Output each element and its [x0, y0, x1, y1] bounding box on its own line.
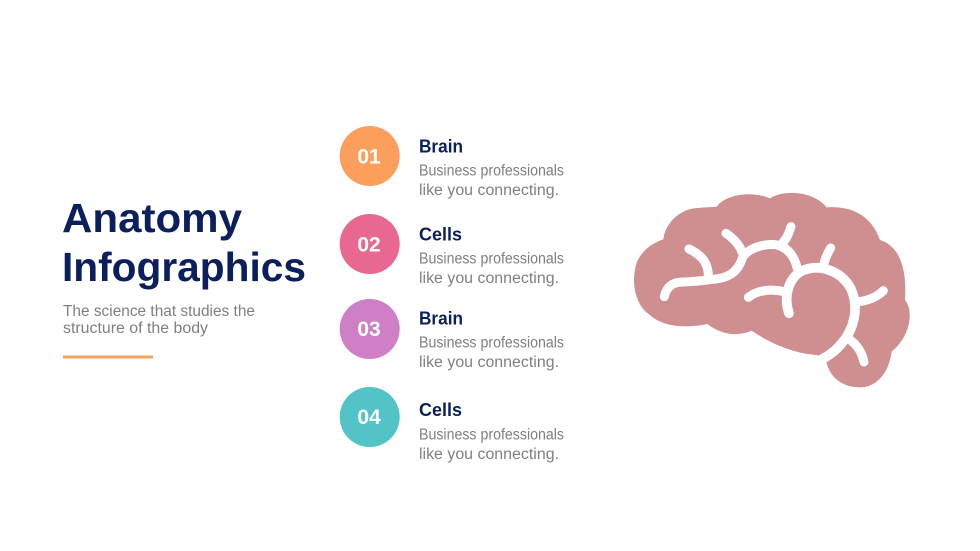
subtitle: structure of the body: [63, 320, 208, 337]
description: [419, 334, 564, 371]
heading: Brain: Brain: [419, 136, 463, 156]
description: Business professionals: [419, 162, 564, 180]
badge 01: 01: [357, 146, 381, 168]
description: Business professionals: [419, 250, 564, 268]
badge 02: 02: [357, 234, 381, 256]
badge 04: [340, 387, 400, 447]
description: like you connecting.: [419, 182, 559, 199]
description: [419, 162, 564, 199]
description: like you connecting.: [419, 354, 559, 371]
title: Anatomy: [62, 195, 242, 241]
badge 04: 04: [357, 406, 381, 429]
heading: Cells: Cells: [419, 399, 462, 420]
description: Business professionals: [419, 334, 564, 352]
item 04: [340, 387, 564, 463]
heading: Brain: Brain: [419, 308, 463, 328]
item 03: [340, 299, 564, 371]
title: [62, 195, 306, 290]
description: like you connecting.: [419, 446, 559, 463]
item 01: [340, 126, 564, 199]
description: [419, 426, 564, 463]
description: Business professionals: [419, 426, 564, 444]
description: [419, 250, 564, 287]
subtitle: [63, 303, 255, 337]
description: like you connecting.: [419, 270, 559, 287]
accent rule: [63, 356, 153, 358]
icon: brain: [634, 193, 910, 387]
subtitle: The science that studies the: [63, 303, 255, 320]
badge 02: [340, 214, 400, 274]
title: Infographics: [62, 244, 306, 290]
item 02: [340, 214, 564, 287]
badge 01: [340, 126, 400, 186]
badge 03: [340, 299, 400, 359]
heading: Cells: Cells: [419, 224, 462, 244]
badge 03: 03: [357, 318, 381, 341]
